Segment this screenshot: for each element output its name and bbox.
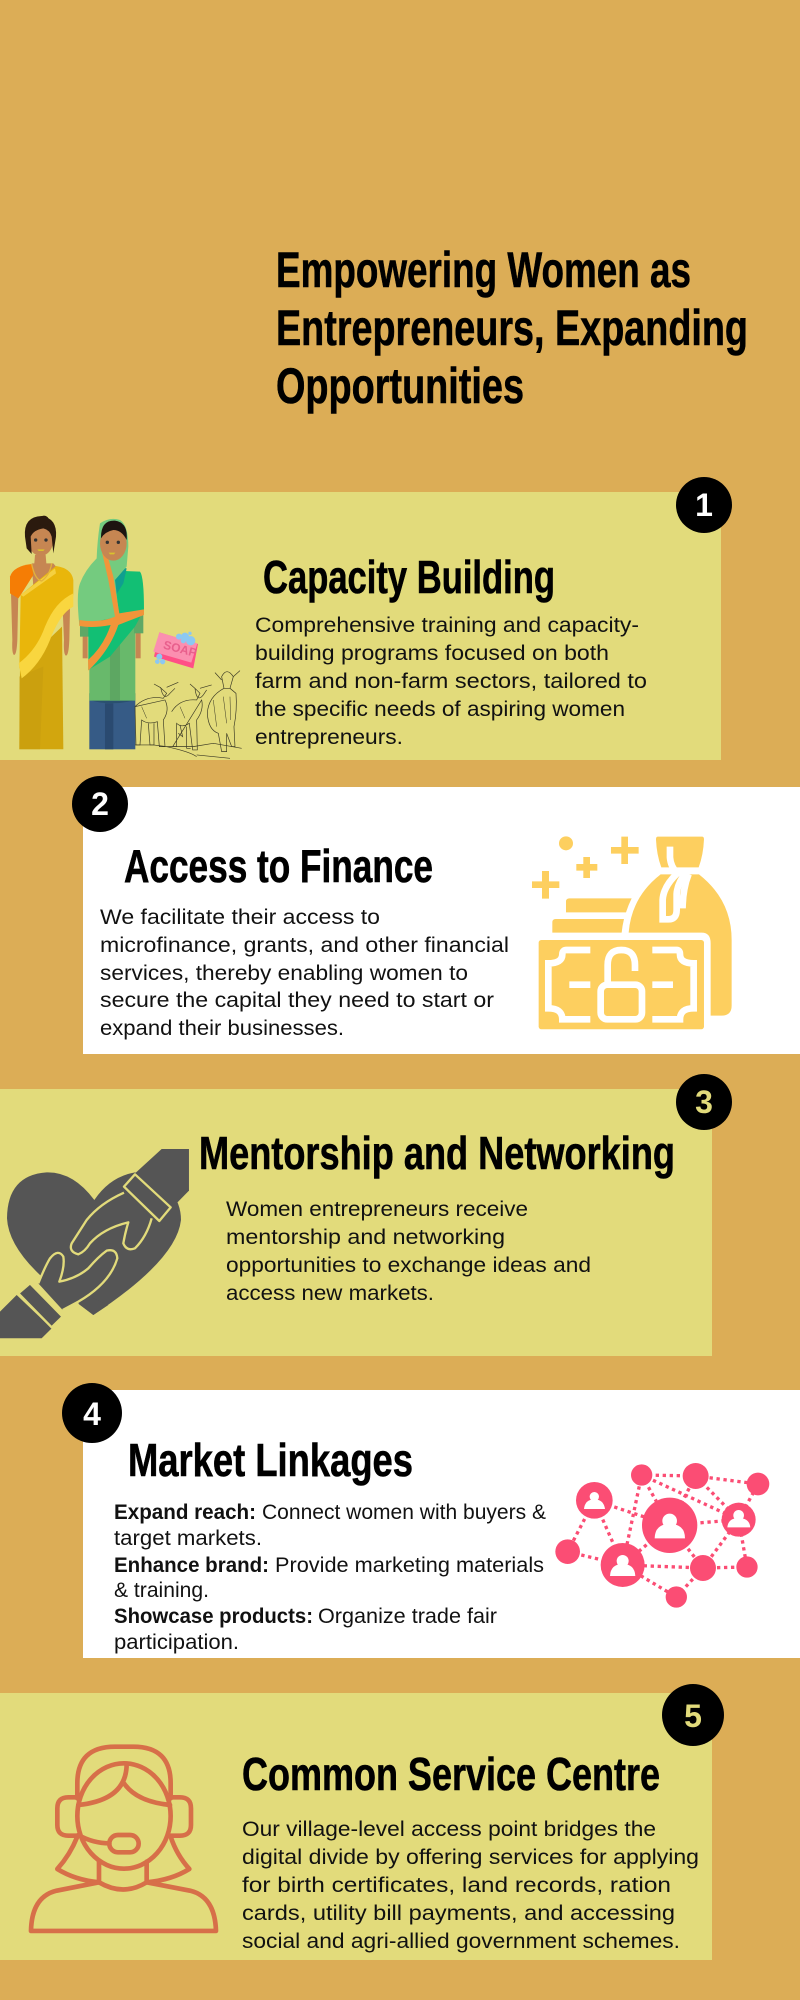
icon: call-centre woman with headset — [31, 1747, 216, 1931]
text: common service centre body — [242, 1818, 699, 1953]
title: Opportunities — [276, 358, 524, 414]
number badge 5: 5 — [684, 1698, 702, 1734]
text: market linkages body: Provide marketing materials — [275, 1554, 544, 1577]
text: access to finance body: We facilitate their access to — [100, 906, 380, 929]
text: market linkages body: & training. — [114, 1579, 209, 1602]
text: capacity building body — [255, 614, 647, 749]
title — [276, 242, 748, 414]
text: common service centre body: for birth certificates, land records, ration — [242, 1874, 671, 1897]
text: common service centre body: Our village-level access point bridges the — [242, 1818, 656, 1841]
text: access to finance body: services, thereby enabling women to — [100, 962, 468, 985]
panel: capacity building — [0, 477, 732, 760]
text: mentorship body: Women entrepreneurs receive — [226, 1198, 528, 1221]
text: capacity building body: Comprehensive training and capacity- — [255, 614, 639, 637]
panel: common service centre — [0, 1684, 724, 1960]
text: common service centre body: social and agri-allied government schemes. — [242, 1930, 680, 1953]
text: capacity building body: farm and non-farm sectors, tailored to — [255, 670, 647, 693]
text: access to finance body: expand their businesses. — [100, 1017, 344, 1040]
number badge 3: 3 — [695, 1084, 713, 1120]
text: mentorship body: opportunities to exchange ideas and — [226, 1254, 591, 1277]
text: access to finance body — [100, 906, 509, 1040]
text: access to finance body: microfinance, grants, and other financial — [100, 934, 509, 957]
text: mentorship body — [226, 1198, 591, 1305]
number badge 3 — [676, 1074, 732, 1130]
text: market linkages body: Showcase products: — [114, 1605, 313, 1628]
panel: access to finance — [72, 776, 800, 1054]
icon: money bag and banknote with lock — [532, 836, 732, 1029]
number badge 4: 4 — [83, 1396, 101, 1432]
text: market linkages body: Connect women with buyers & — [262, 1501, 546, 1524]
number badge 5 — [662, 1684, 724, 1746]
heading: common service centre: Common Service Centre — [242, 1748, 660, 1800]
text: common service centre body: cards, utility bill payments, and accessing — [242, 1902, 675, 1925]
number badge 1 — [676, 477, 732, 533]
heading: market linkages: Market Linkages — [128, 1434, 413, 1486]
heading: capacity building: Capacity Building — [263, 551, 555, 603]
heading: mentorship and networking: Mentorship and Networking — [199, 1127, 675, 1179]
text: common service centre body: digital divide by offering services for applying — [242, 1846, 699, 1869]
heading: access to finance: Access to Finance — [124, 840, 433, 892]
panel: market linkages — [62, 1383, 800, 1658]
number badge 2 — [72, 776, 128, 832]
text: market linkages body: Organize trade fair — [318, 1605, 497, 1628]
text: mentorship body: mentorship and networking — [226, 1226, 505, 1249]
text: market linkages body: target markets. — [114, 1527, 262, 1550]
text: capacity building body: entrepreneurs. — [255, 726, 403, 749]
text: capacity building body: building programs focused on both — [255, 642, 609, 665]
text: access to finance body: secure the capital they need to start or — [100, 989, 494, 1012]
icon: heart with clasped hands — [0, 1149, 189, 1338]
number badge 2: 2 — [91, 786, 109, 822]
text: market linkages body: participation. — [114, 1631, 239, 1654]
text: mentorship body: access new markets. — [226, 1282, 434, 1305]
text: market linkages body: Enhance brand: — [114, 1554, 269, 1577]
text: market linkages body: Expand reach: — [114, 1501, 256, 1524]
panel: mentorship and networking — [0, 1074, 732, 1356]
illustration: women, soap and goats — [10, 516, 242, 758]
illustration: women, soap and goats: SOAP — [162, 638, 198, 660]
text: capacity building body: the specific needs of aspiring women — [255, 698, 625, 721]
text: market linkages body — [114, 1501, 546, 1654]
icon: people network — [555, 1463, 769, 1608]
number badge 1: 1 — [695, 487, 713, 523]
number badge 4 — [62, 1383, 122, 1443]
